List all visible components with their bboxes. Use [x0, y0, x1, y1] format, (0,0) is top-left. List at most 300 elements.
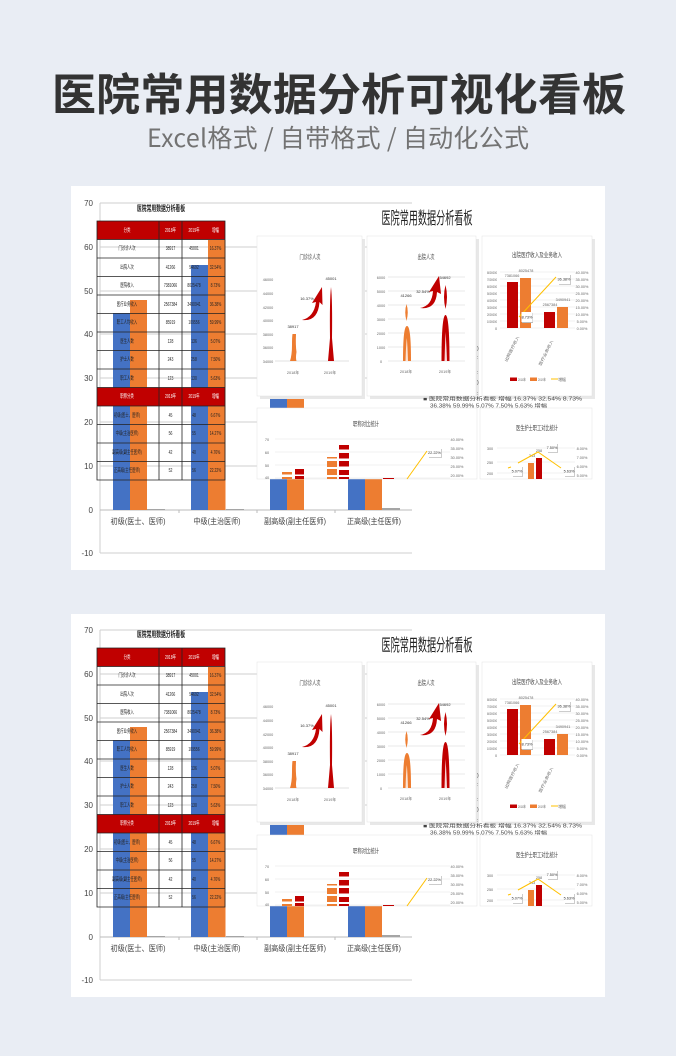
legend: 2019年 — [538, 377, 546, 382]
data table: 32.54% — [210, 691, 221, 697]
overflow text fragments: : — [477, 391, 478, 397]
panel: inpatient visits: 5000 — [377, 717, 385, 721]
data table: 2019年 — [189, 392, 200, 400]
panel: outpatient visits: 44000 — [263, 719, 273, 723]
panel: professional title stats: 25.00% — [451, 892, 464, 896]
icon: growth arrow — [302, 287, 322, 320]
dashboard heading: 医院常用数据分析看板 — [382, 636, 472, 655]
background bar chart: 50 — [84, 714, 94, 723]
background bar chart: 60 — [84, 670, 94, 679]
data table: 59.99% — [210, 746, 221, 752]
background bar chart: 10 — [84, 889, 94, 898]
panel: professional title stats: 35.00% — [451, 874, 464, 878]
panel: revenue chart: 15.00% — [576, 733, 589, 737]
background bar chart: 正高级(主任医师) — [347, 943, 401, 953]
data table: 2018年 — [165, 226, 176, 234]
panel: inpatient visits: 3000 — [377, 745, 385, 749]
panel: revenue chart: 3490941 — [556, 298, 570, 302]
panel: outpatient visits: 36000 — [263, 346, 273, 350]
panel: revenue chart — [482, 236, 595, 399]
panel: outpatient visits: 42000 — [263, 733, 273, 737]
panel: outpatient visits: 2019年 — [324, 797, 336, 802]
panel: revenue chart: 出院医疗收入 — [503, 335, 520, 362]
background bar chart: 40 — [84, 330, 94, 339]
callout — [522, 312, 533, 323]
data table: 128 — [168, 338, 174, 344]
panel: staff comparison: 258 — [536, 449, 542, 453]
icon: growth arrow — [420, 276, 441, 308]
data table: 7.50% — [211, 356, 220, 362]
data table: 医院收入 — [120, 281, 134, 289]
icon: growth arrow — [302, 714, 322, 747]
data table: 5.07% — [211, 765, 220, 771]
panel: outpatient visits: 38917 — [287, 751, 299, 756]
panel: inpatient visits: 4000 — [377, 731, 385, 735]
panel: inpatient visits: 41266 — [400, 293, 412, 298]
panel: revenue chart: 6000000 — [487, 285, 497, 289]
data table: 8.73% — [211, 282, 220, 288]
data table: 7381066 — [164, 709, 177, 715]
panel: staff comparison: 7.00% — [577, 456, 588, 460]
panel: outpatient visits: 45001 — [325, 703, 337, 708]
background bar chart: 副高级(副主任医师) — [264, 516, 326, 526]
panel: dashboard screenshot 2 — [71, 614, 605, 997]
data table: 36.38% — [210, 728, 221, 734]
data table: 分类 — [124, 653, 131, 661]
panel: inpatient visits: 41266 — [400, 720, 412, 725]
panel: revenue chart: 8025478 — [519, 696, 533, 700]
panel: professional title stats: 20.00% — [451, 474, 464, 478]
data table: 42 — [169, 449, 173, 455]
callout — [558, 274, 571, 285]
panel: outpatient visits: 16.37% — [300, 296, 314, 301]
data table: 正高级(主任医师) — [114, 893, 140, 901]
data table: 3490941 — [187, 301, 201, 307]
data table: 56 — [192, 467, 196, 473]
data table: 45001 — [189, 245, 199, 251]
panel: revenue chart: 35.00% — [576, 278, 589, 282]
background bar chart: 30 — [84, 801, 94, 810]
data table: 门诊诊人次 — [118, 244, 136, 252]
panel: professional title stats — [257, 835, 477, 907]
panel: revenue chart: 30.00% — [576, 712, 589, 716]
panel: professional title stats: 25.00% — [451, 465, 464, 469]
data table: 6.67% — [211, 839, 220, 845]
data table: 职工人数 — [120, 801, 134, 809]
data table: 职称分类 — [120, 819, 134, 827]
data table: 55 — [192, 430, 196, 436]
data table: 48 — [192, 412, 196, 418]
panel: revenue chart: 20.00% — [576, 726, 589, 730]
data table: 增幅 — [212, 653, 219, 661]
overflow text fragments: : — [477, 782, 478, 788]
panel: staff comparison: 6.00% — [577, 465, 588, 469]
data table: 护士人数 — [120, 782, 134, 790]
data table: 36.38% — [210, 301, 221, 307]
panel: inpatient visits: 出院人次 — [418, 678, 435, 687]
panel: professional title stats: 35.00% — [451, 447, 464, 451]
data table: 42 — [169, 876, 173, 882]
data table — [97, 648, 225, 907]
panel: staff comparison: 7.00% — [577, 883, 588, 887]
panel: staff comparison: 医生护士职工对比统计 — [516, 423, 558, 432]
data table: 7381066 — [164, 282, 177, 288]
panel: revenue chart: 7000000 — [487, 278, 497, 282]
data table: 55 — [192, 857, 196, 863]
panel: outpatient visits: 40000 — [263, 746, 273, 750]
panel: outpatient visits: 40000 — [263, 319, 273, 323]
panel: staff comparison — [480, 408, 592, 479]
panel: revenue chart: 10.00% — [576, 313, 589, 317]
panel: revenue chart: 0 — [495, 327, 497, 331]
panel: outpatient visits — [257, 662, 365, 825]
data table: 40 — [192, 876, 196, 882]
background bar chart: 70 — [84, 199, 94, 208]
data table: 副高级(副主任医师) — [112, 875, 142, 883]
panel: professional title stats: 70 — [265, 865, 269, 869]
data table: 109556 — [188, 746, 200, 752]
data table: 中级(主治医师) — [116, 429, 139, 437]
data table: 2019年 — [189, 819, 200, 827]
data table: 109556 — [188, 319, 200, 325]
data table: 2019年 — [189, 226, 200, 234]
panel: outpatient visits: 38917 — [287, 324, 299, 329]
callout — [558, 701, 571, 712]
data table: 护士人数 — [120, 355, 134, 363]
data table: 医疗业务收入 — [117, 300, 138, 308]
background bar chart: 60 — [84, 243, 94, 252]
panel: inpatient visits: 3000 — [377, 318, 385, 322]
panel: revenue chart: 0.00% — [577, 754, 588, 758]
panel: professional title stats — [257, 408, 477, 480]
panel: revenue chart: 25.00% — [576, 719, 589, 723]
panel: revenue chart: 8000000 — [487, 271, 497, 275]
data table: 医生人数 — [120, 337, 134, 345]
panel: professional title stats: 50 — [265, 891, 269, 895]
panel: outpatient visits: 34000 — [263, 787, 273, 791]
panel: revenue chart: 3000000 — [487, 733, 497, 737]
data table: 130 — [191, 802, 197, 808]
panel: revenue chart: 5.00% — [577, 747, 588, 751]
background bar chart — [81, 626, 412, 985]
data table: 2019年 — [189, 653, 200, 661]
data table: 职工人均收入 — [117, 318, 138, 326]
table heading: 医院常用数据分析看板 — [137, 629, 185, 639]
panel: staff comparison: 243 — [529, 881, 535, 885]
panel: revenue chart: 35.00% — [576, 705, 589, 709]
panel: outpatient visits: 16.37% — [300, 723, 314, 728]
panel: revenue chart: 2000000 — [487, 313, 497, 317]
overflow text: ■ 医院常用数据分析看板 增幅 16.37% 32.54% 8.73% — [423, 822, 583, 830]
overflow text: 36.38% 59.99% 5.07% 7.50% 5.63% 增幅 — [430, 402, 547, 410]
panel: professional title stats: 40.00% — [451, 865, 464, 869]
panel: inpatient visits: 32.54% — [416, 716, 430, 721]
data table: 48 — [192, 839, 196, 845]
data table: 243 — [168, 783, 174, 789]
data table: 123 — [168, 375, 174, 381]
data table: 初级(医士、医师) — [114, 411, 140, 419]
panel: inpatient visits: 2018年 — [400, 796, 412, 801]
data table: 增幅 — [212, 392, 219, 400]
data table: 门诊诊人次 — [118, 671, 136, 679]
panel: revenue chart: 2567384 — [543, 730, 557, 734]
panel: staff comparison — [480, 835, 592, 906]
data table: 2018年 — [165, 653, 176, 661]
panel: staff comparison: 258 — [536, 876, 542, 880]
panel: staff comparison: 5.00% — [577, 901, 588, 905]
panel: inpatient visits: 1000 — [377, 346, 385, 350]
overflow text fragments: ) — [477, 807, 479, 813]
data table: 2018年 — [165, 819, 176, 827]
panel: inpatient visits: 5000 — [377, 290, 385, 294]
panel: inpatient visits: 2018年 — [400, 369, 412, 374]
panel: professional title stats: 70 — [265, 438, 269, 442]
overflow text fragments — [477, 773, 479, 824]
background bar chart: 10 — [84, 462, 94, 471]
data table: 38917 — [166, 672, 176, 678]
background bar chart: 初级(医士、医师) — [110, 516, 166, 526]
legend — [510, 377, 566, 382]
data table: 128 — [168, 765, 174, 771]
background bar chart: 0 — [89, 506, 94, 515]
panel: revenue chart: 1000000 — [487, 320, 497, 324]
data table: 243 — [168, 356, 174, 362]
background bar chart: 70 — [84, 626, 94, 635]
panel: staff comparison: 243 — [529, 454, 535, 458]
icon: growth arrow — [420, 703, 441, 735]
panel: inpatient visits: 4000 — [377, 304, 385, 308]
data table: 5.07% — [211, 338, 220, 344]
data table: 出院人次 — [120, 263, 134, 271]
panel: inpatient visits: 0 — [380, 787, 382, 791]
panel: outpatient visits: 38000 — [263, 333, 273, 337]
panel: outpatient visits: 46000 — [263, 705, 273, 709]
panel: outpatient visits: 44000 — [263, 292, 273, 296]
callout: 5.63% — [564, 470, 575, 474]
data table: 45001 — [189, 672, 199, 678]
background bar chart: 40 — [84, 757, 94, 766]
panel: professional title stats: 50 — [265, 464, 269, 468]
data table: 136 — [191, 765, 197, 771]
panel: inpatient visits: 2000 — [377, 332, 385, 336]
data table: 85919 — [166, 319, 176, 325]
data table: 54692 — [189, 691, 199, 697]
data table: 6.67% — [211, 412, 220, 418]
overflow text fragments: ) — [477, 380, 479, 386]
callout: 22.22% — [428, 878, 442, 882]
data table: 59.99% — [210, 319, 221, 325]
panel: staff comparison: 200 — [487, 899, 493, 903]
data table: 130 — [191, 375, 197, 381]
data table: 8025478 — [187, 282, 201, 288]
data table: 258 — [191, 356, 197, 362]
callout — [428, 875, 442, 885]
background bar chart: -10 — [81, 549, 94, 558]
panel: revenue chart: 医疗业务收入 — [537, 339, 554, 366]
callout: 5.07% — [512, 896, 523, 900]
callout: 7.50% — [547, 446, 558, 450]
overflow text fragments: ) — [477, 773, 479, 779]
panel: revenue chart: 8000000 — [487, 698, 497, 702]
data table: 医院收入 — [120, 708, 134, 716]
panel: outpatient visits: 2018年 — [287, 370, 299, 375]
overflow text fragments — [477, 346, 479, 397]
data table: 增幅 — [212, 226, 219, 234]
panel: inpatient visits: 54692 — [439, 702, 451, 707]
panel: professional title stats: 30.00% — [451, 883, 464, 887]
panel: revenue chart: 7381066 — [505, 701, 519, 705]
callout — [428, 448, 442, 458]
data table: 14.27% — [210, 857, 221, 863]
data table: 52 — [169, 467, 173, 473]
data table: 54692 — [189, 264, 199, 270]
panel: staff comparison: 6.00% — [577, 892, 588, 896]
legend: 增幅 — [558, 377, 566, 382]
data table: 22.22% — [210, 467, 221, 473]
data table: 中级(主治医师) — [116, 856, 139, 864]
panel: staff comparison: 250 — [487, 888, 493, 892]
background bar chart: 50 — [84, 287, 94, 296]
data table: 出院人次 — [120, 690, 134, 698]
panel: revenue chart: 出院医疗收入及业务收入 — [512, 250, 562, 259]
data table: 正高级(主任医师) — [114, 466, 140, 474]
panel: professional title stats: 职称对比统计 — [353, 419, 379, 428]
background bar chart: 正高级(主任医师) — [347, 516, 401, 526]
data table: 医疗业务收入 — [117, 727, 138, 735]
panel: revenue chart: 出院医疗收入 — [503, 762, 520, 789]
data table: 56 — [169, 857, 173, 863]
panel: inpatient visits: 2019年 — [439, 369, 451, 374]
panel: revenue chart: 10.00% — [576, 740, 589, 744]
callout: 5.07% — [512, 470, 523, 474]
data table: 分类 — [124, 226, 131, 234]
panel: revenue chart: 医疗业务收入 — [537, 766, 554, 793]
panel: revenue chart: 4000000 — [487, 299, 497, 303]
panel: professional title stats: 职称对比统计 — [353, 846, 379, 855]
overflow text — [423, 396, 583, 410]
panel: outpatient visits: 42000 — [263, 306, 273, 310]
panel: professional title stats: 40 — [265, 903, 269, 907]
panel: revenue chart: 5.00% — [577, 320, 588, 324]
panel: revenue chart: 25.00% — [576, 292, 589, 296]
data table: 3490941 — [187, 728, 201, 734]
panel: revenue chart: 4000000 — [487, 726, 497, 730]
panel: inpatient visits — [367, 236, 479, 399]
panel: outpatient visits: 门诊诊人次 — [300, 678, 321, 687]
data table: 增幅 — [212, 819, 219, 827]
panel: outpatient visits: 34000 — [263, 360, 273, 364]
panel: revenue chart: 5000000 — [487, 719, 497, 723]
overflow text: 36.38% 59.99% 5.07% 7.50% 5.63% 增幅 — [430, 830, 547, 836]
data table: 7.50% — [211, 783, 220, 789]
panel: revenue chart: 2567384 — [543, 303, 557, 307]
panel: staff comparison: 8.00% — [577, 874, 588, 878]
callout: 7.50% — [547, 873, 558, 877]
data table: 22.22% — [210, 894, 221, 900]
panel: revenue chart: 30.00% — [576, 285, 589, 289]
data table: 45 — [169, 412, 173, 418]
panel: staff comparison: 200 — [487, 472, 493, 476]
data table: 4.76% — [211, 449, 220, 455]
data table: 52 — [169, 894, 173, 900]
panel: inpatient visits — [367, 662, 479, 825]
data table: 5.63% — [211, 375, 220, 381]
data table — [97, 221, 225, 480]
panel: revenue chart: 40.00% — [576, 271, 589, 275]
background bar chart — [81, 199, 412, 558]
panel: revenue chart — [482, 662, 595, 825]
panel: outpatient visits: 45001 — [325, 276, 337, 281]
panel: staff comparison: 250 — [487, 461, 493, 465]
panel: revenue chart: 20.00% — [576, 299, 589, 303]
panel: staff comparison: 5.00% — [577, 474, 588, 478]
background bar chart: 初级(医士、医师) — [110, 943, 166, 953]
panel: inpatient visits: 54692 — [439, 275, 451, 280]
panel: outpatient visits — [257, 236, 365, 399]
data table: 16.37% — [210, 245, 221, 251]
callout: 36.38% — [558, 278, 571, 282]
data table: 45 — [169, 839, 173, 845]
background bar chart: 中级(主治医师) — [194, 516, 241, 526]
overflow text fragments: : — [477, 370, 478, 376]
table heading: 医院常用数据分析看板 — [137, 203, 185, 213]
panel: revenue chart: 0 — [495, 754, 497, 758]
title: 医院常用数据分析可视化看板 — [52, 59, 626, 123]
panel: revenue chart: 6000000 — [487, 712, 497, 716]
panel: staff comparison: 300 — [487, 874, 493, 878]
data table: 2018年 — [165, 392, 176, 400]
callout: 36.38% — [558, 704, 571, 708]
data table: 41266 — [166, 264, 176, 270]
panel: professional title stats: 20.00% — [451, 901, 464, 905]
panel: revenue chart: 15.00% — [576, 306, 589, 310]
data table: 初级(医士、医师) — [114, 838, 140, 846]
panel: revenue chart: 3000000 — [487, 306, 497, 310]
legend: 2018年 — [518, 804, 526, 809]
data table: 136 — [191, 338, 197, 344]
callout: 8.73% — [522, 316, 533, 320]
callout: 22.22% — [428, 451, 442, 455]
data table: 85919 — [166, 746, 176, 752]
panel: outpatient visits: 门诊诊人次 — [300, 252, 321, 261]
panel: revenue chart: 1000000 — [487, 747, 497, 751]
panel: professional title stats: 30.00% — [451, 456, 464, 460]
background bar chart: 20 — [84, 845, 94, 854]
panel: revenue chart: 3490941 — [556, 725, 570, 729]
data table: 8025478 — [187, 709, 201, 715]
background bar chart: -10 — [81, 976, 94, 985]
data table: 32.54% — [210, 264, 221, 270]
data table: 职工人均收入 — [117, 745, 138, 753]
data table: 职称分类 — [120, 392, 134, 400]
panel: outpatient visits: 36000 — [263, 773, 273, 777]
background bar chart: 30 — [84, 374, 94, 383]
data table: 41266 — [166, 691, 176, 697]
panel: revenue chart: 40.00% — [576, 698, 589, 702]
overflow text — [423, 822, 583, 836]
data table: 56 — [169, 430, 173, 436]
data table: 14.27% — [210, 430, 221, 436]
legend: 增幅 — [558, 804, 566, 809]
panel: outpatient visits: 2018年 — [287, 797, 299, 802]
background bar chart: 0 — [89, 933, 94, 942]
background bar chart: 中级(主治医师) — [194, 943, 241, 953]
legend: 2019年 — [538, 804, 546, 809]
overflow text fragments: : — [477, 818, 478, 824]
data table: 16.37% — [210, 672, 221, 678]
data table: 8.73% — [211, 709, 220, 715]
data table: 123 — [168, 802, 174, 808]
